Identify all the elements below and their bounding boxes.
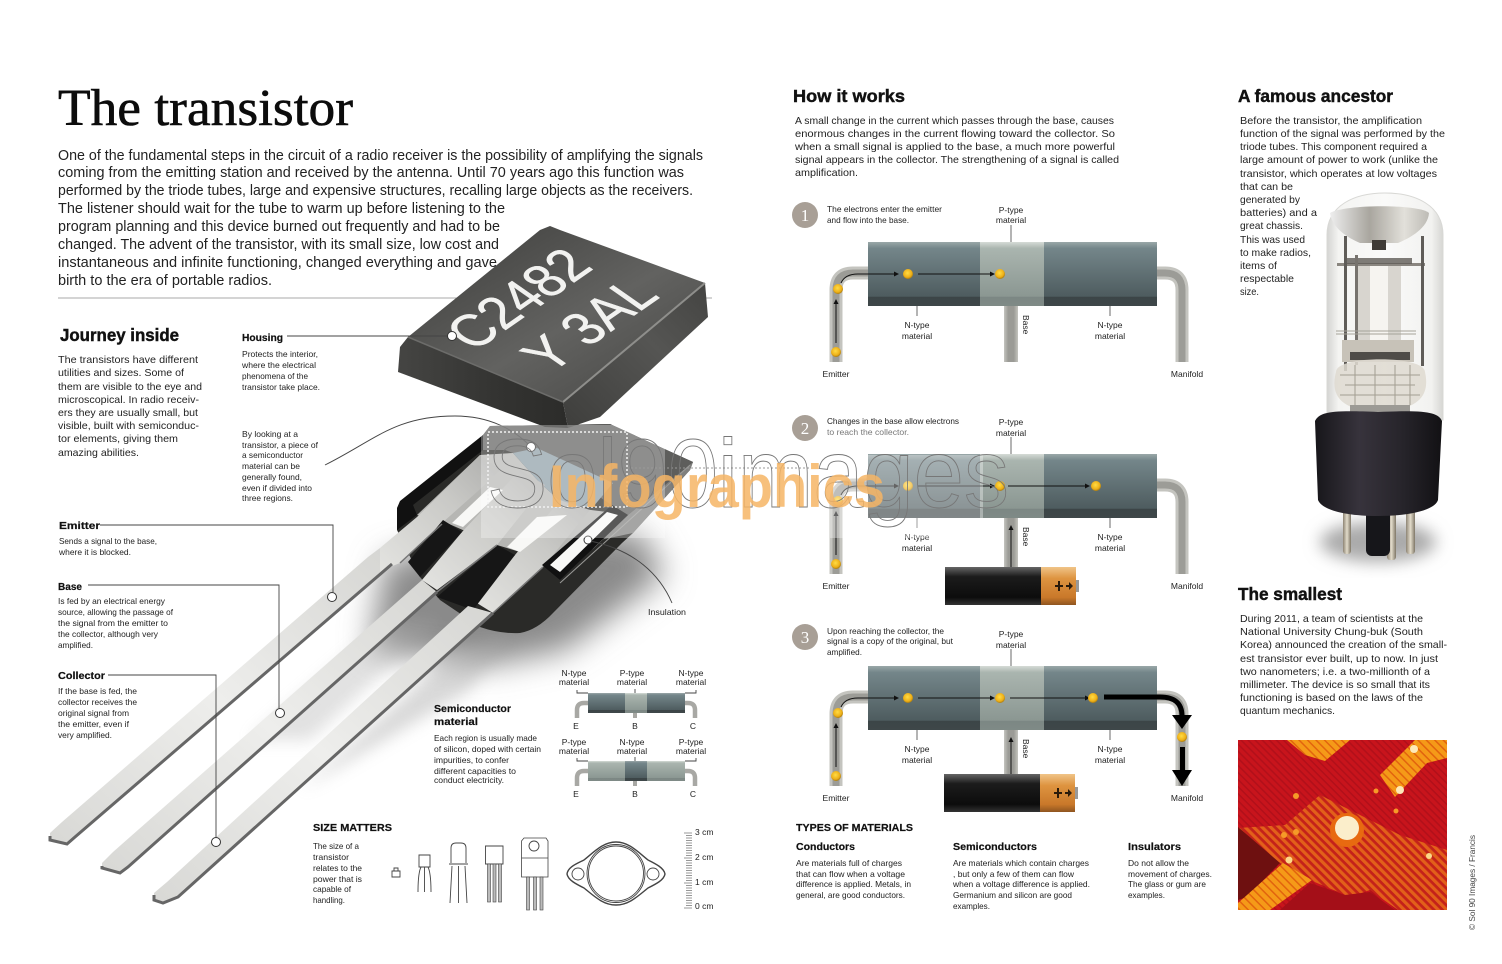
a famous ancestor: batteries) and a [1240, 207, 1317, 219]
how it works: How it works [793, 86, 905, 106]
journey inside [58, 325, 202, 459]
callout: semiconductor piece: even if divided into [242, 483, 312, 493]
conductors [796, 842, 911, 900]
lead: collector [154, 606, 493, 903]
journey inside: amazing abilities. [58, 447, 139, 459]
step 1 diagram: Base [1021, 315, 1031, 335]
a famous ancestor: This was used [1240, 234, 1305, 246]
housing lid: Y 3AL [509, 268, 671, 381]
semiconductors: Germanium and silicon are good [953, 890, 1072, 900]
semiconductor diagram NPN: N-type [561, 668, 587, 678]
semiconductor material text: different capacities to [434, 766, 516, 776]
size matters text: handling. [313, 895, 345, 905]
size matters text [313, 823, 392, 905]
ruler: 3 cm [695, 827, 713, 837]
callout: housing: Protects the interior, [242, 349, 318, 359]
housing lid [398, 226, 708, 428]
callout: collector: If the base is fed, the [58, 686, 137, 696]
step 2 diagram: to reach the collector. [827, 427, 909, 437]
bakelite base [1315, 411, 1442, 516]
semiconductor diagram PNP: B [632, 789, 638, 799]
step 3 diagram: Upon reaching the collector, the [827, 626, 944, 636]
step 3 diagram: material [1095, 755, 1125, 765]
the smallest: quantum mechanics. [1240, 705, 1335, 717]
callout: collector: original signal from [58, 708, 129, 718]
how it works: A small change in the current which passes through the base, causes [795, 115, 1114, 127]
microscope image of atoms [1238, 740, 1447, 910]
a famous ancestor: great chassis. [1240, 220, 1303, 232]
insulators: examples. [1128, 890, 1165, 900]
conductors: that can flow when a voltage [796, 869, 905, 879]
step 1 diagram: Emitter [823, 369, 850, 379]
callout: base: source, allowing the passage of [58, 607, 174, 617]
a famous ancestor: size. [1240, 286, 1259, 298]
a famous ancestor: transistor, which operates at low voltages [1240, 168, 1437, 180]
the smallest: During 2011, a team of scientists at the [1240, 613, 1423, 625]
intro text: coming from the emitting station and received by the antenna. Until 70 years ago this function was [58, 165, 684, 181]
journey inside: utilities and sizes. Some of [58, 367, 184, 379]
pins [1343, 510, 1415, 560]
intro text: birth to the era of portable radios. [58, 273, 272, 289]
step 1 diagram: N-type [1097, 320, 1123, 330]
semiconductor diagram NPN: E [573, 721, 579, 731]
how it works [793, 86, 1119, 179]
insulators: The glass or gum are [1128, 879, 1206, 889]
step 3 diagram: material [902, 755, 932, 765]
semiconductor material text: conduct electricity. [434, 775, 504, 785]
intro text: program planning and this device burned out frequently and had to be [58, 219, 500, 235]
size matters text: power that is [313, 874, 362, 884]
insulators [1128, 842, 1212, 900]
semiconductors: , but only a few of them can flow [953, 869, 1075, 879]
step 2 diagram: Manifold [1171, 581, 1203, 591]
insulation strip [542, 505, 628, 580]
semiconductor diagram PNP: material [617, 746, 647, 756]
semiconductor diagram NPN: P-type [620, 668, 645, 678]
insulators: movement of charges. [1128, 869, 1212, 879]
step 1 number: 1 [801, 206, 809, 225]
callout: housing: where the electrical [241, 360, 316, 370]
ruler [684, 827, 713, 911]
callout: housing [241, 332, 456, 392]
insulators: Do not allow the [1128, 858, 1189, 868]
journey inside: visible, built with semiconduc- [58, 420, 200, 432]
semiconductor diagram NPN: material [676, 677, 706, 687]
callout: base: amplified. [58, 640, 93, 650]
intro text: changed. The advent of the transistor, with its small size, low cost and [58, 237, 499, 253]
battery [945, 567, 1079, 605]
callout: base: Is fed by an electrical energy [58, 596, 166, 606]
step 2 number [792, 415, 818, 441]
watermark: Sol90images [487, 419, 1009, 528]
battery [944, 774, 1078, 812]
semiconductor diagram NPN: material [617, 677, 647, 687]
semiconductor material text: of silicon, doped with certain [434, 744, 541, 754]
how it works: amplification. [795, 167, 858, 179]
title: The transistor [58, 80, 353, 137]
the smallest: Korea) announced the creation of the small- [1240, 639, 1448, 651]
step 3 diagram: P-type [999, 629, 1024, 639]
how it works: enormous changes in the current flowing toward the collector. So [795, 128, 1115, 140]
semiconductor patch [513, 448, 613, 507]
step 2 diagram: N-type [1097, 532, 1123, 542]
callout: emitter: Sends a signal to the base, [59, 536, 157, 546]
conductors: Conductors [796, 842, 855, 853]
semiconductor diagram PNP: material [676, 746, 706, 756]
watermark: Infographics [549, 453, 885, 520]
step 3 diagram: N-type [1097, 744, 1123, 754]
ruler: 0 cm [695, 901, 713, 911]
step 1 diagram: material [1095, 331, 1125, 341]
a famous ancestor: items of [1240, 260, 1277, 272]
a famous ancestor: to make radios, [1240, 247, 1311, 259]
size matters text: transistor [313, 852, 349, 862]
semiconductor material text: Each region is usually made [434, 733, 537, 743]
journey inside: Journey inside [60, 325, 179, 345]
semiconductor diagram PNP [559, 737, 706, 799]
glass envelope [1327, 193, 1443, 420]
types of materials [796, 823, 1212, 911]
white inner strips [452, 487, 503, 527]
callout: insulation: Insulation [648, 607, 686, 617]
a famous ancestor: respectable [1240, 273, 1294, 285]
getter dish [1330, 206, 1429, 243]
step 3 diagram: material [996, 640, 1026, 650]
semiconductor diagram PNP: material [559, 746, 589, 756]
semiconductor diagram NPN: material [559, 677, 589, 687]
transistor size outlines [392, 838, 665, 910]
semiconductor material text [434, 703, 541, 785]
callout: emitter: Emitter [59, 521, 100, 532]
step 1 diagram [792, 202, 1203, 379]
step 3 diagram: Manifold [1171, 793, 1203, 803]
a famous ancestor: that can be [1240, 181, 1293, 193]
step 1 diagram: and flow into the base. [827, 215, 909, 225]
ruler: 2 cm [695, 852, 713, 862]
illustration: opened transistor [50, 226, 708, 903]
callout: base [58, 582, 284, 718]
the smallest: millimeter. The device is so small that its [1240, 679, 1430, 691]
step 3 number: 3 [801, 628, 809, 647]
step 3 diagram: Emitter [823, 793, 850, 803]
semiconductor diagram PNP: E [573, 789, 579, 799]
ruler: 1 cm [695, 877, 713, 887]
intro text [58, 148, 703, 289]
the smallest [1238, 584, 1448, 717]
step 2 diagram: Changes in the base allow electrons [827, 416, 959, 426]
the smallest: The smallest [1238, 584, 1342, 604]
callout: semiconductor piece: material can be [242, 461, 300, 471]
a famous ancestor: large amount of power to work (unlike the [1240, 154, 1438, 166]
step 2 diagram: Base [1021, 527, 1031, 547]
step 2 number: 2 [801, 419, 809, 438]
wide part of collector lead [472, 500, 590, 613]
callout: insulation [584, 536, 686, 617]
internal structure [1334, 236, 1426, 417]
callout: base: the collector, although very [58, 629, 159, 639]
size matters text: The size of a [313, 841, 359, 851]
size matters text: SIZE MATTERS [313, 823, 392, 834]
left black band [397, 435, 483, 530]
intro text: performed by the triode tubes, large and expensive structures, recalling large objects as the receivers. [58, 183, 693, 199]
callout: base: the signal from the emitter to [58, 618, 168, 628]
callout: emitter [58, 521, 337, 602]
step 1 diagram: P-type [999, 205, 1024, 215]
a famous ancestor: triode tubes. This component required a [1240, 141, 1427, 153]
the smallest: est transistor ever built, up to now. In just [1240, 653, 1438, 665]
semiconductor diagram NPN [559, 668, 706, 731]
step 2 diagram: Emitter [823, 581, 850, 591]
journey inside: microscopical. In radio receiv- [58, 394, 199, 406]
callout: semiconductor piece: By looking at a [242, 429, 298, 439]
step 1 diagram: The electrons enter the emitter [827, 204, 942, 214]
lower shell [397, 424, 693, 633]
a famous ancestor [1238, 86, 1445, 298]
inner floor [417, 453, 607, 565]
step 2 diagram: material [1095, 543, 1125, 553]
step 2 diagram: P-type [999, 417, 1024, 427]
callout: collector: Collector [58, 671, 105, 682]
callout: semiconductor piece: three regions. [242, 493, 293, 503]
housing marking: C2482 [433, 239, 605, 359]
journey inside: them are visible to the eye and [58, 381, 202, 393]
types of materials: TYPES OF MATERIALS [796, 823, 913, 834]
conductors: general, are good conductors. [796, 890, 905, 900]
step 3 diagram: N-type [904, 744, 930, 754]
callout: semiconductor piece: generally found, [242, 472, 302, 482]
step 1 diagram: material [902, 331, 932, 341]
how it works: signal appears in the collector. The strengthening of a signal is called [795, 154, 1119, 166]
step 3 diagram: signal is a copy of the original, but [827, 636, 954, 646]
the smallest: National University Chung-buk (South [1240, 626, 1423, 638]
step 2 diagram: material [902, 543, 932, 553]
wide part of base lead [422, 470, 545, 590]
the smallest: functioning is based on the laws of the [1240, 692, 1423, 704]
credit: © Sol 90 Images / Francis [1467, 835, 1477, 930]
upper rim [483, 424, 693, 515]
callout: semiconductor piece: transistor, a piece of [242, 440, 319, 450]
semiconductor diagram PNP: P-type [562, 737, 587, 747]
a famous ancestor: A famous ancestor [1238, 86, 1393, 106]
semiconductors: Are materials which contain charges [953, 858, 1089, 868]
intro text: One of the fundamental steps in the circuit of a radio receiver is the possibility of amplifying the signals [58, 148, 703, 164]
semiconductor diagram NPN: B [632, 721, 638, 731]
step 3 diagram: amplified. [827, 647, 862, 657]
callout: collector: collector receives the [58, 697, 137, 707]
semiconductor diagram NPN: C [690, 721, 696, 731]
semiconductor material text: Semiconductor [434, 703, 511, 715]
semiconductor diagram PNP: P-type [679, 737, 704, 747]
lead: base [102, 580, 437, 873]
how it works: when a small signal is applied to the base, a much more powerful [794, 141, 1115, 153]
callout: base: Base [58, 582, 82, 593]
callout: semiconductor piece: a semiconductor [242, 450, 303, 460]
step 1 number [792, 202, 818, 228]
callout: collector [58, 671, 220, 846]
semiconductor material text: material [434, 716, 478, 728]
right rail [592, 462, 693, 550]
callout: collector: the emitter, even if [58, 719, 130, 729]
callout: housing: phenomena of the [242, 371, 308, 381]
callout: collector: very amplified. [58, 730, 112, 740]
step 3 diagram [792, 624, 1203, 812]
step 2 diagram [792, 415, 1203, 605]
a famous ancestor: generated by [1240, 194, 1301, 206]
shadow under transistor [250, 530, 665, 790]
the smallest: two nanometers; i.e. a two-millionth of a [1240, 666, 1430, 678]
size matters text: relates to the [313, 863, 362, 873]
insulators: Insulators [1128, 842, 1181, 853]
step 1 diagram: material [996, 215, 1026, 225]
step 3 number [792, 624, 818, 650]
callout: housing: Housing [242, 333, 283, 344]
semiconductor diagram PNP: C [690, 789, 696, 799]
wide part of emitter lead [380, 455, 500, 575]
callout: semiconductor piece [242, 416, 536, 503]
step 3 diagram: Base [1021, 739, 1031, 759]
semiconductors: examples. [953, 901, 990, 911]
size matters text: capable of [313, 884, 352, 894]
a famous ancestor: Before the transistor, the amplification [1240, 115, 1422, 127]
step 1 diagram: Manifold [1171, 369, 1203, 379]
journey inside: The transistors have different [58, 354, 198, 366]
semiconductors: Semiconductors [953, 842, 1037, 853]
semiconductors [952, 842, 1090, 911]
semiconductors: when a voltage difference is applied. [952, 879, 1090, 889]
amplified signal arrows [1104, 697, 1192, 786]
intro text: instantaneous and infinite functioning, changed everything and gave [58, 255, 497, 271]
conductors: Are materials full of charges [796, 858, 902, 868]
step 2 diagram: N-type [904, 532, 930, 542]
callout: emitter: where it is blocked. [58, 547, 131, 557]
callout: housing: transistor take place. [242, 382, 320, 392]
a famous ancestor: function of the signal was performed by the [1240, 128, 1445, 140]
black notches [408, 520, 462, 577]
semiconductor material text: impurities, to confer [434, 755, 509, 765]
semiconductor diagram NPN: N-type [678, 668, 704, 678]
journey inside: ers they are usually small, but [58, 407, 198, 419]
journey inside: tor elements, giving them [58, 433, 178, 445]
lead: emitter [50, 548, 380, 844]
intro text: The listener should wait for the tube to warm up before listening to the [58, 201, 505, 217]
semiconductor diagram PNP: N-type [619, 737, 645, 747]
conductors: difference is applied. Metals, in [796, 879, 911, 889]
step 2 diagram: material [996, 428, 1026, 438]
vacuum tube photo [1315, 193, 1443, 562]
step 1 diagram: N-type [904, 320, 930, 330]
